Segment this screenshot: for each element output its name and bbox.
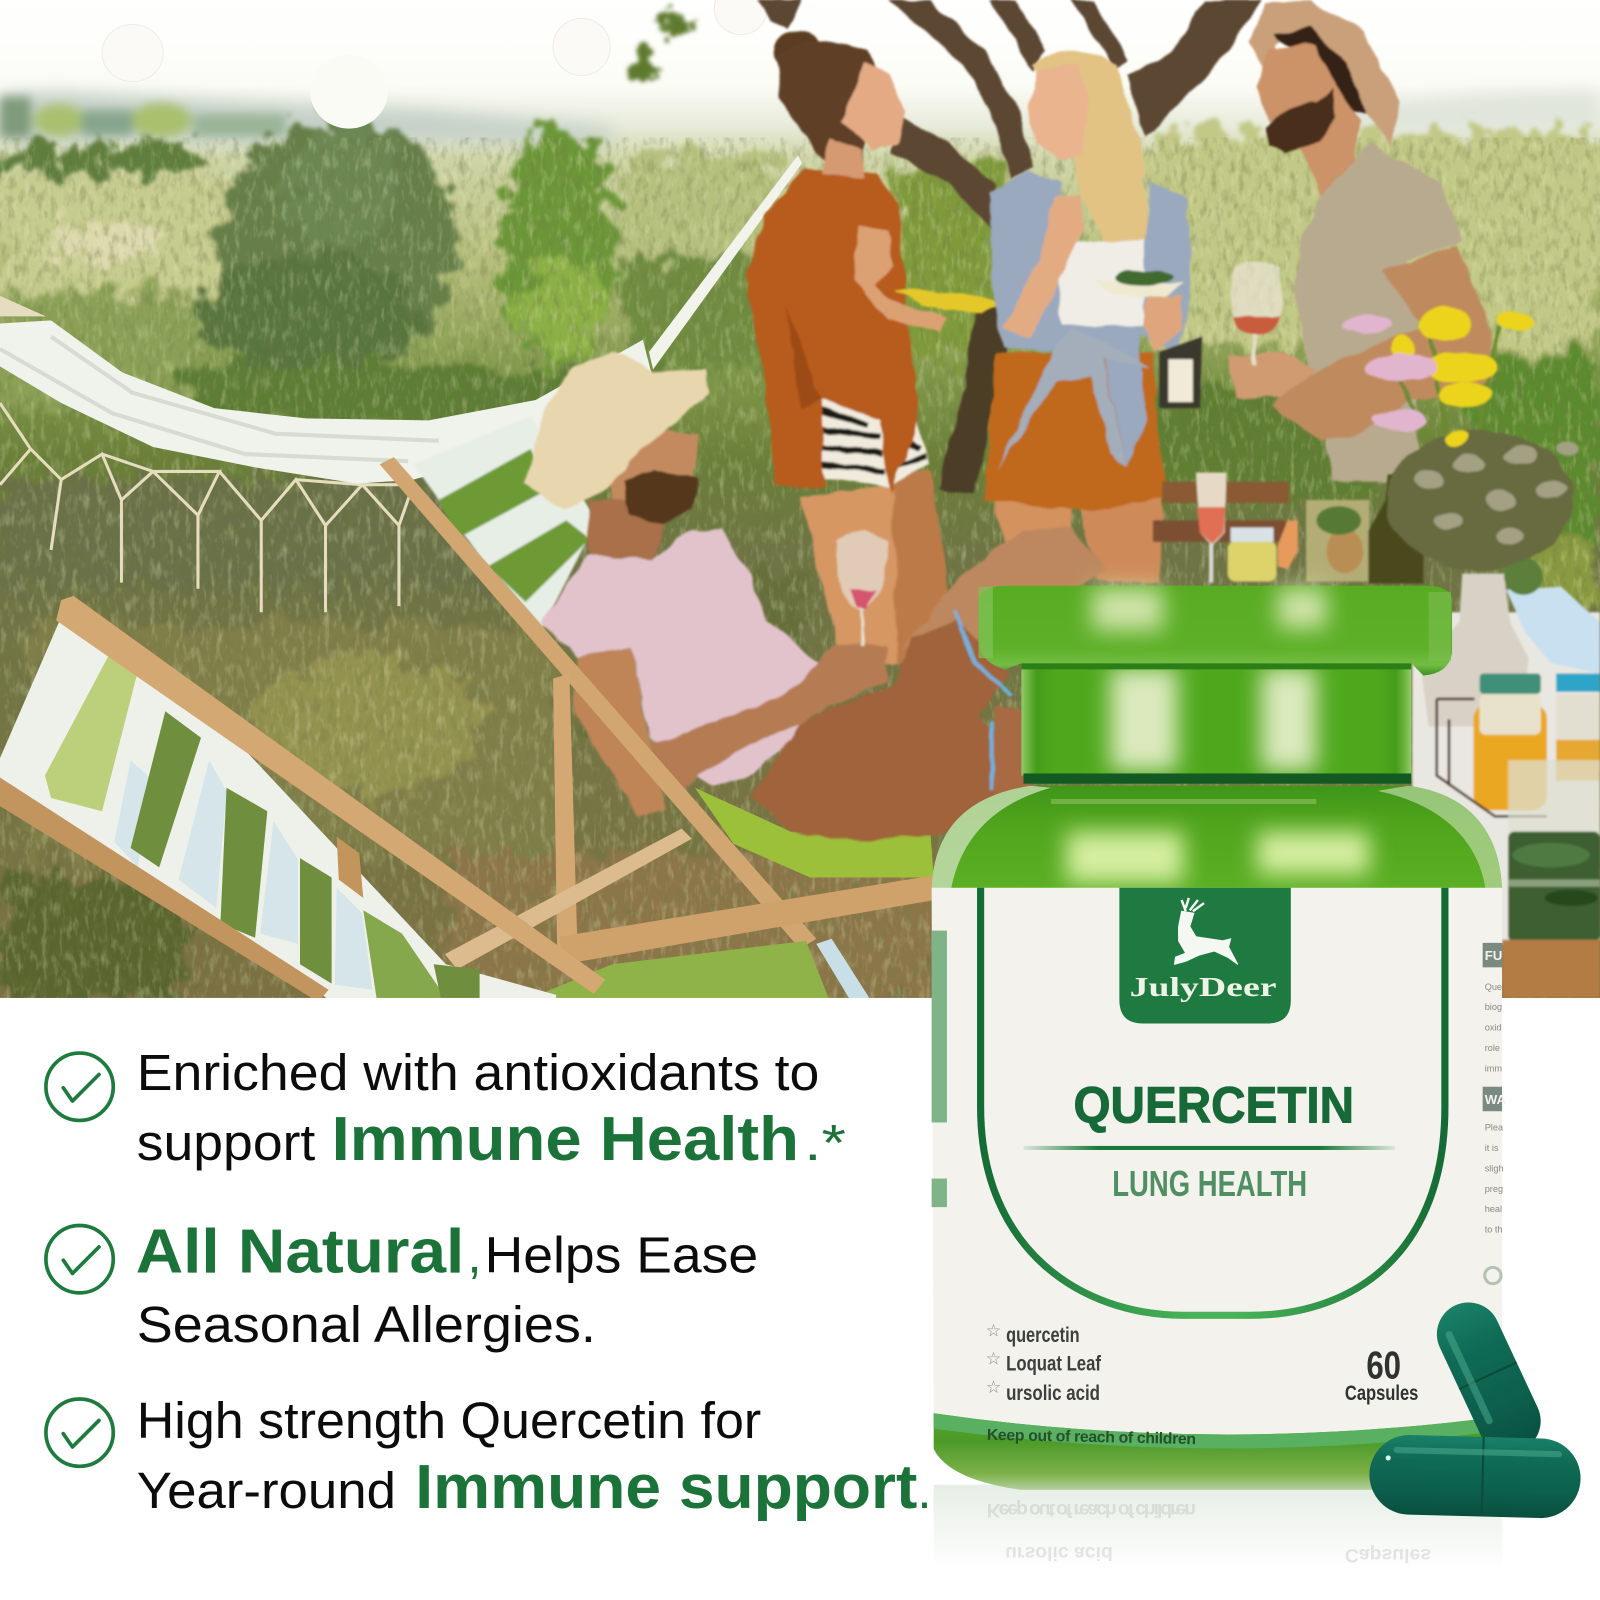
comma: ,: [467, 1226, 482, 1283]
cloth stripes: [45, 645, 480, 998]
tree: [757, 0, 1262, 494]
cushion: [531, 941, 829, 998]
text: year-round: Year-round: [137, 1462, 396, 1519]
leaves on branch: [629, 11, 690, 76]
forearm and hand: [852, 224, 949, 329]
face: [1029, 63, 1090, 161]
benefit 3: [46, 1392, 932, 1522]
product bottle: [932, 586, 1506, 1571]
flowers: [1343, 307, 1578, 569]
side panel: function and warning: sligh: [1485, 1163, 1504, 1173]
middle deck chair cloth: [413, 416, 597, 628]
label base strip: [934, 1413, 1502, 1448]
woman in orange shirt: [746, 31, 1003, 663]
paper lanterns: [102, 0, 767, 129]
lower leg: [995, 704, 1031, 796]
side panel: function and warning: imm: [1485, 1063, 1502, 1073]
text: high strength quercetin: High strength Quercetin for: [137, 1392, 761, 1449]
product name: QUERCETIN: [1073, 1076, 1354, 1133]
side panel: function and warning: [1483, 943, 1506, 1284]
highlight: all natural: All Natural: [136, 1217, 464, 1286]
shorts: [984, 352, 1165, 510]
warning line: Keep out of reach of children: [987, 1427, 1196, 1448]
foreground deck chair: [0, 596, 869, 1002]
bottle cap: [979, 586, 1452, 676]
ingredient list: [986, 1322, 1102, 1405]
beard: [624, 469, 699, 523]
hat: [1249, 0, 1400, 146]
woman in blue shirt: [984, 50, 1191, 582]
side panel: function and warning: role: [1485, 1043, 1500, 1053]
raising arm: [1005, 194, 1084, 337]
capsule: upright: [1426, 1292, 1551, 1463]
ingredient list: ☆: [986, 1378, 1001, 1398]
brand name: JulyDeer: [1130, 971, 1277, 1002]
label: [932, 888, 1506, 1448]
ingredient list: Loquat Leaf: [1006, 1351, 1102, 1375]
label arch frame: [981, 888, 1445, 1315]
side panel: function and warning: Que: [1485, 982, 1502, 992]
highlight: immune health: Immune Health: [332, 1105, 799, 1174]
middle deck chair frame: [380, 457, 935, 969]
orange shirt: [746, 168, 918, 495]
top frame: [56, 596, 605, 994]
face: [842, 61, 905, 149]
icon: leaping deer logo: [1174, 898, 1238, 964]
hair: [1276, 26, 1367, 114]
ingredient list: ☆: [986, 1349, 1001, 1369]
side panel: function and warning: preg: [1485, 1184, 1503, 1194]
benefit 1: [46, 1044, 846, 1174]
cross brace: [337, 837, 363, 898]
product subtitle: LUNG HEALTH: [1112, 1164, 1307, 1204]
side panel: function and warning: Plea: [1485, 1123, 1504, 1133]
reclining man in pink shirt: [526, 352, 1107, 841]
icon: check circle 2: [46, 1226, 113, 1293]
shirt: [542, 530, 822, 785]
bottle reflection: ursolic acid: [1005, 1542, 1113, 1564]
cushion: [695, 788, 934, 878]
blue wristbands: [954, 612, 1012, 791]
face: [602, 429, 699, 502]
meadow background: [0, 0, 1600, 1000]
divider rule: [1023, 1146, 1395, 1150]
salad container: [1508, 760, 1600, 942]
hammock net: [0, 403, 413, 612]
bottle base: [934, 1408, 1500, 1490]
arm: [573, 649, 666, 816]
bottle reflection: Keep out of reach of children: [987, 1499, 1196, 1521]
left side panel strip: [932, 931, 947, 1207]
icon: check circle 3: [46, 1399, 113, 1466]
white top: [1056, 241, 1148, 337]
plate with salad: [1093, 280, 1185, 298]
text: support: support: [137, 1114, 315, 1171]
icon: check circle 1: [46, 1053, 113, 1120]
yellow plate: [895, 289, 1003, 314]
side panel: function and warning: oxid: [1485, 1023, 1502, 1033]
grass texture: [0, 138, 1600, 1000]
orange juice jar: [1473, 673, 1547, 810]
legs: [993, 500, 1074, 543]
period: .: [917, 1462, 932, 1519]
picnic table items: [1153, 472, 1423, 584]
wine glass: [835, 531, 888, 647]
hanging lantern: [1159, 337, 1202, 408]
capsules: [1368, 1292, 1582, 1519]
bottle reflection: [934, 1485, 1502, 1571]
side panel: function and warning: it is: [1485, 1143, 1499, 1153]
side panel: function and warning: FU: [1485, 948, 1502, 963]
tee: [1294, 142, 1463, 482]
bottom white panel: [0, 998, 932, 1600]
legs: [800, 486, 903, 663]
arms: [1273, 245, 1492, 441]
cloth: [0, 612, 556, 998]
benefit 2: [46, 1217, 758, 1353]
ingredient list: ursolic acid: [1006, 1381, 1100, 1405]
man with hat holding wine: [1228, 0, 1492, 482]
count: 60: [1366, 1345, 1401, 1388]
lifestyle photo: friends picnicking in a meadow: [0, 0, 1600, 1002]
capsule: lying: [1368, 1434, 1582, 1519]
neck: [587, 500, 663, 559]
bottle shoulder: [932, 786, 1502, 890]
hair: [1033, 50, 1148, 267]
side panel: function and warning: biog: [1485, 1002, 1502, 1012]
straw hat: [526, 352, 709, 512]
bottle neck: [1021, 663, 1411, 784]
wine glass: [1232, 261, 1282, 365]
second jar: [1556, 673, 1600, 781]
text: helps ease: Helps Ease: [485, 1226, 758, 1283]
blue shirt: [990, 170, 1191, 469]
table, vase and jars: [1412, 558, 1600, 998]
side panel: function and warning: to th: [1485, 1225, 1503, 1235]
ingredient list: quercetin: [1006, 1323, 1080, 1347]
asterisk mark: .*: [804, 1114, 846, 1171]
hair: [772, 29, 820, 62]
brand tab: [1119, 888, 1291, 1023]
shorts: [752, 618, 1010, 841]
bottle reflection: Capsules: [1345, 1544, 1431, 1566]
beard: [1265, 87, 1335, 153]
raised knee: [903, 528, 1107, 648]
striped shorts: [817, 400, 930, 488]
lower frame: [0, 778, 329, 1002]
side panel: function and warning: WA: [1485, 1092, 1506, 1107]
count: [1345, 1345, 1418, 1405]
hammock: [0, 155, 802, 484]
text: seasonal allergies: Seasonal Allergies.: [137, 1296, 596, 1353]
side panel: function and warning: heal: [1485, 1204, 1502, 1214]
count: Capsules: [1345, 1381, 1418, 1405]
highlight: immune support: Immune support: [415, 1453, 917, 1522]
text: enriched with antioxidants: Enriched with antioxidants to: [137, 1044, 819, 1101]
face and neck: [1257, 46, 1362, 199]
ingredient list: ☆: [986, 1322, 1001, 1342]
